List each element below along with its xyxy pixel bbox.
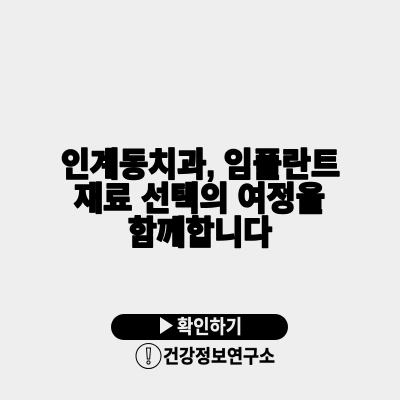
icon: play triangle xyxy=(160,317,173,334)
title: 인계동치과, 임플란트 xyxy=(61,146,340,183)
icon: exclamation circle xyxy=(136,344,161,368)
brand logo xyxy=(136,344,275,368)
button: confirm xyxy=(111,314,288,340)
title xyxy=(61,146,340,251)
title: 함께합니다 xyxy=(128,214,272,251)
button label: 확인하기 xyxy=(177,316,242,338)
title: 재료 선택의 여정을 xyxy=(74,180,325,217)
brand name: 건강정보연구소 xyxy=(163,346,275,367)
